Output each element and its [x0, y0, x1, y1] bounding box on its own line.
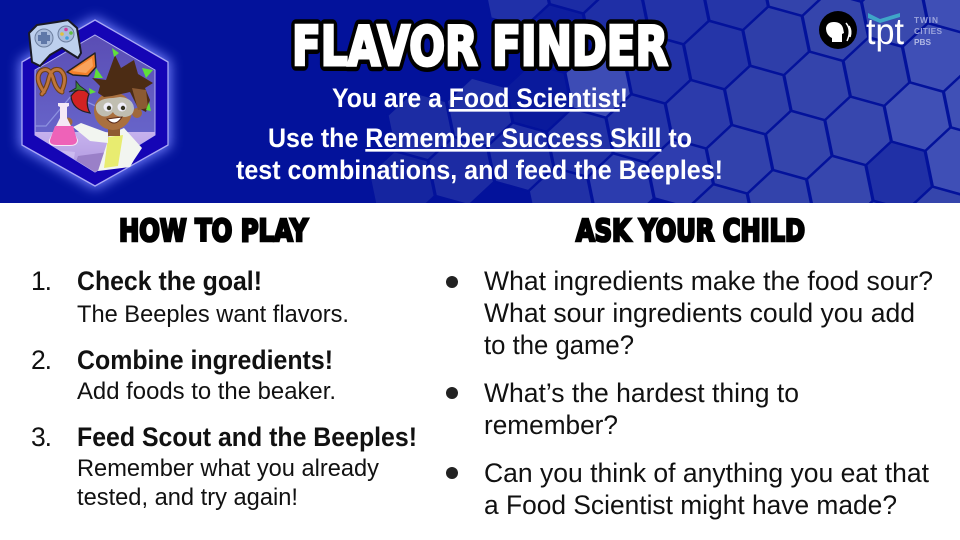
- question 2: remember?: [484, 410, 618, 440]
- heading: how to play: HOW TO PLAY: [119, 214, 309, 249]
- step 3: [31, 422, 417, 511]
- question 3: a Food Scientist might have made?: [484, 490, 897, 520]
- question 1: [446, 266, 933, 360]
- TPT Twin Cities PBS logo: CITIES: [914, 26, 942, 36]
- step 2: Combine ingredients!: [77, 345, 333, 375]
- step 3: Remember what you already: [77, 455, 379, 482]
- step 1: 1.: [31, 266, 52, 296]
- ask your child questions: [446, 266, 933, 520]
- step 2: [31, 345, 336, 405]
- TPT Twin Cities PBS logo: tpt: [866, 11, 905, 52]
- question 3: Can you think of anything you eat that: [484, 458, 930, 488]
- heading: ask your child: ASK YOUR CHILD: [576, 214, 805, 249]
- orange slice: [67, 53, 96, 76]
- header banner: [0, 0, 960, 203]
- step 1: Check the goal!: [77, 266, 262, 296]
- title: FLAVOR FINDER: [292, 15, 668, 78]
- flask with pink liquid: [49, 103, 78, 146]
- game controller: [29, 20, 81, 66]
- question 1: What sour ingredients could you add: [484, 298, 915, 328]
- step 3: tested, and try again!: [77, 484, 298, 511]
- step 1: The Beeples want flavors.: [77, 301, 349, 328]
- how to play list: [31, 266, 417, 511]
- header subtitle text: You are a Food Scientist!: [332, 83, 628, 113]
- chili pepper: [69, 81, 90, 113]
- TPT Twin Cities PBS logo: TWIN: [914, 15, 938, 25]
- question 2: What’s the hardest thing to: [484, 378, 799, 408]
- header subtitle text: [236, 83, 723, 185]
- title: FLAVOR FINDER: [292, 15, 668, 78]
- header subtitle text: Use the Remember Success Skill to: [268, 123, 692, 153]
- question 3: [446, 458, 930, 520]
- question 1: What ingredients make the food sour?: [484, 266, 933, 296]
- step 2: Add foods to the beaker.: [77, 378, 336, 405]
- game badge illustration: [22, 20, 168, 186]
- PBS logo: [819, 11, 857, 49]
- question 2: [446, 378, 799, 440]
- step 2: 2.: [31, 345, 52, 375]
- header subtitle text: test combinations, and feed the Beeples!: [236, 155, 723, 185]
- step 3: 3.: [31, 422, 52, 452]
- badge hexagon frame: [22, 20, 168, 186]
- step 3: Feed Scout and the Beeples!: [77, 422, 417, 452]
- TPT Twin Cities PBS logo: PBS: [914, 37, 931, 47]
- hexagon background pattern: [370, 0, 960, 203]
- scientist character: [64, 48, 153, 171]
- step 1: [31, 266, 349, 328]
- pretzel: [38, 69, 65, 94]
- question 1: to the game?: [484, 330, 634, 360]
- TPT Twin Cities PBS logo: [866, 11, 942, 52]
